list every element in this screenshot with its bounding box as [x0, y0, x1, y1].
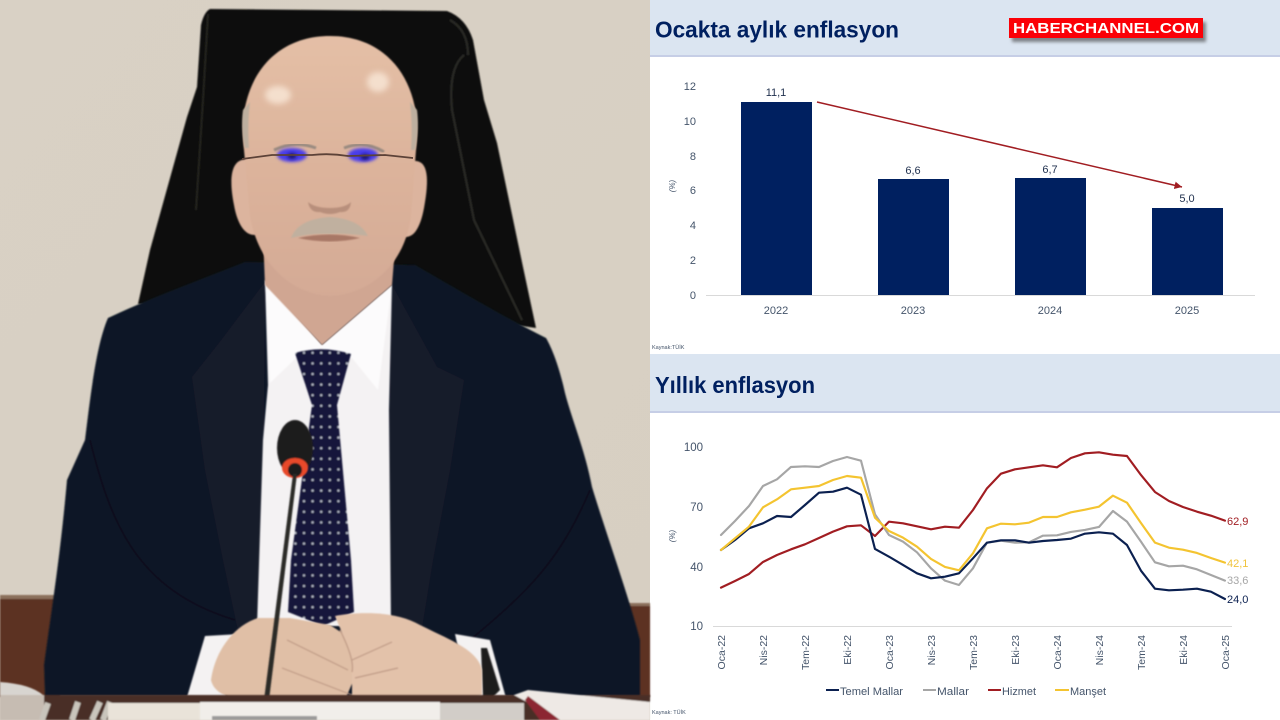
series end labels: 33,6 — [1227, 575, 1248, 587]
x axis month labels: Tem-22 — [800, 635, 812, 670]
mic red ring — [282, 458, 308, 478]
x axis month labels: Oca-22 — [716, 635, 728, 669]
legend: Mallar — [937, 686, 969, 698]
temple hair — [242, 102, 418, 150]
y axis labels — [684, 442, 703, 633]
nose — [308, 202, 351, 214]
face shape — [243, 36, 417, 296]
panel: photo of speaker at desk — [0, 0, 650, 720]
x axis month labels: Eki-24 — [1178, 635, 1190, 665]
y axis labels: 40 — [690, 562, 703, 574]
legend: Temel Mallar — [840, 686, 903, 698]
source note: Kaynak: TÜİK — [652, 709, 686, 716]
y axis labels: 8 — [690, 151, 696, 163]
desk with papers — [0, 682, 650, 720]
line: Temel Mallar — [721, 488, 1225, 599]
line: Mallar — [721, 457, 1225, 585]
y axis unit: (%) — [668, 529, 677, 542]
mouth — [298, 234, 360, 242]
header band: annual — [650, 354, 1280, 413]
x axis month labels: Tem-23 — [968, 635, 980, 670]
x axis month labels: Eki-22 — [842, 635, 854, 665]
y axis labels: 12 — [684, 81, 696, 93]
x axis month labels: Nis-22 — [758, 635, 770, 665]
series end labels: 42,1 — [1227, 558, 1248, 570]
series end labels: 62,9 — [1227, 516, 1248, 528]
neck — [263, 235, 396, 345]
ears — [231, 159, 427, 237]
heading: annual inflation: Yıllık enflasyon — [655, 372, 815, 398]
bar value labels: 6,7 — [1042, 164, 1058, 176]
x axis year labels — [764, 305, 1199, 317]
y axis unit: (%) — [668, 179, 677, 192]
bar chart — [706, 102, 1255, 296]
mic stem — [264, 474, 297, 700]
eyebrows — [274, 144, 384, 152]
forehead highlights — [265, 72, 389, 104]
clasped hands — [211, 613, 482, 706]
x axis line — [713, 626, 1232, 627]
x axis year labels: 2025 — [1175, 305, 1199, 317]
wall background — [0, 0, 650, 720]
y axis labels: 10 — [684, 116, 696, 128]
header band: monthly — [650, 0, 1280, 57]
wristwatch — [481, 648, 500, 700]
navy suit jacket — [44, 262, 640, 696]
y axis labels: 0 — [690, 290, 696, 302]
wood wainscot — [0, 595, 650, 697]
x axis month labels: Oca-24 — [1052, 635, 1064, 669]
x axis month labels: Eki-23 — [1010, 635, 1022, 665]
heading: monthly inflation: Ocakta aylık enflasyon — [655, 16, 899, 42]
series end labels: 24,0 — [1227, 594, 1248, 606]
x axis year labels: 2022 — [764, 305, 788, 317]
x axis month labels: Oca-23 — [884, 635, 896, 669]
line: Hizmet — [721, 452, 1225, 588]
y axis labels — [684, 81, 696, 302]
y axis labels: 6 — [690, 185, 696, 197]
head and face — [231, 36, 427, 345]
source note: Kaynak:TÜİK — [652, 344, 685, 351]
bar value labels — [766, 87, 1195, 205]
panel: annual inflation chart — [650, 354, 1280, 716]
bar value labels: 6,6 — [905, 165, 921, 177]
x axis year labels: 2023 — [901, 305, 925, 317]
line: Manşet — [721, 476, 1225, 570]
line chart — [721, 452, 1225, 599]
x axis month labels: Nis-24 — [1094, 635, 1106, 665]
panel: monthly inflation chart — [650, 0, 1280, 354]
legend — [826, 686, 1106, 698]
x axis month labels: Tem-24 — [1136, 635, 1148, 670]
office chair — [138, 9, 536, 328]
y axis labels: 4 — [690, 220, 696, 232]
arrow: downward trend — [817, 102, 1182, 187]
logo: haberchannel — [1009, 18, 1206, 42]
white shirt and collar — [257, 280, 392, 626]
mic head — [277, 420, 313, 476]
moustache — [291, 217, 368, 238]
legend: Manşet — [1070, 686, 1106, 698]
bar value labels: 5,0 — [1179, 193, 1195, 205]
x axis year labels: 2024 — [1038, 305, 1062, 317]
microphone — [261, 420, 313, 716]
logo: haberchannel: HABERCHANNEL.COM — [1013, 20, 1199, 37]
glasses with blue glare — [242, 148, 413, 162]
y axis labels: 10 — [690, 621, 703, 633]
y axis labels: 2 — [690, 255, 696, 267]
legend: Hizmet — [1002, 686, 1036, 698]
y axis labels: 70 — [690, 502, 703, 514]
shirt cuffs — [187, 634, 506, 702]
dotted navy tie — [288, 349, 354, 626]
y axis labels: 100 — [684, 442, 703, 454]
series end labels — [1227, 516, 1248, 606]
panel background — [650, 0, 1280, 354]
x axis month labels: Oca-25 — [1220, 635, 1232, 669]
bar value labels: 11,1 — [766, 87, 786, 99]
x axis month labels: Nis-23 — [926, 635, 938, 665]
x axis month labels — [716, 635, 1232, 670]
